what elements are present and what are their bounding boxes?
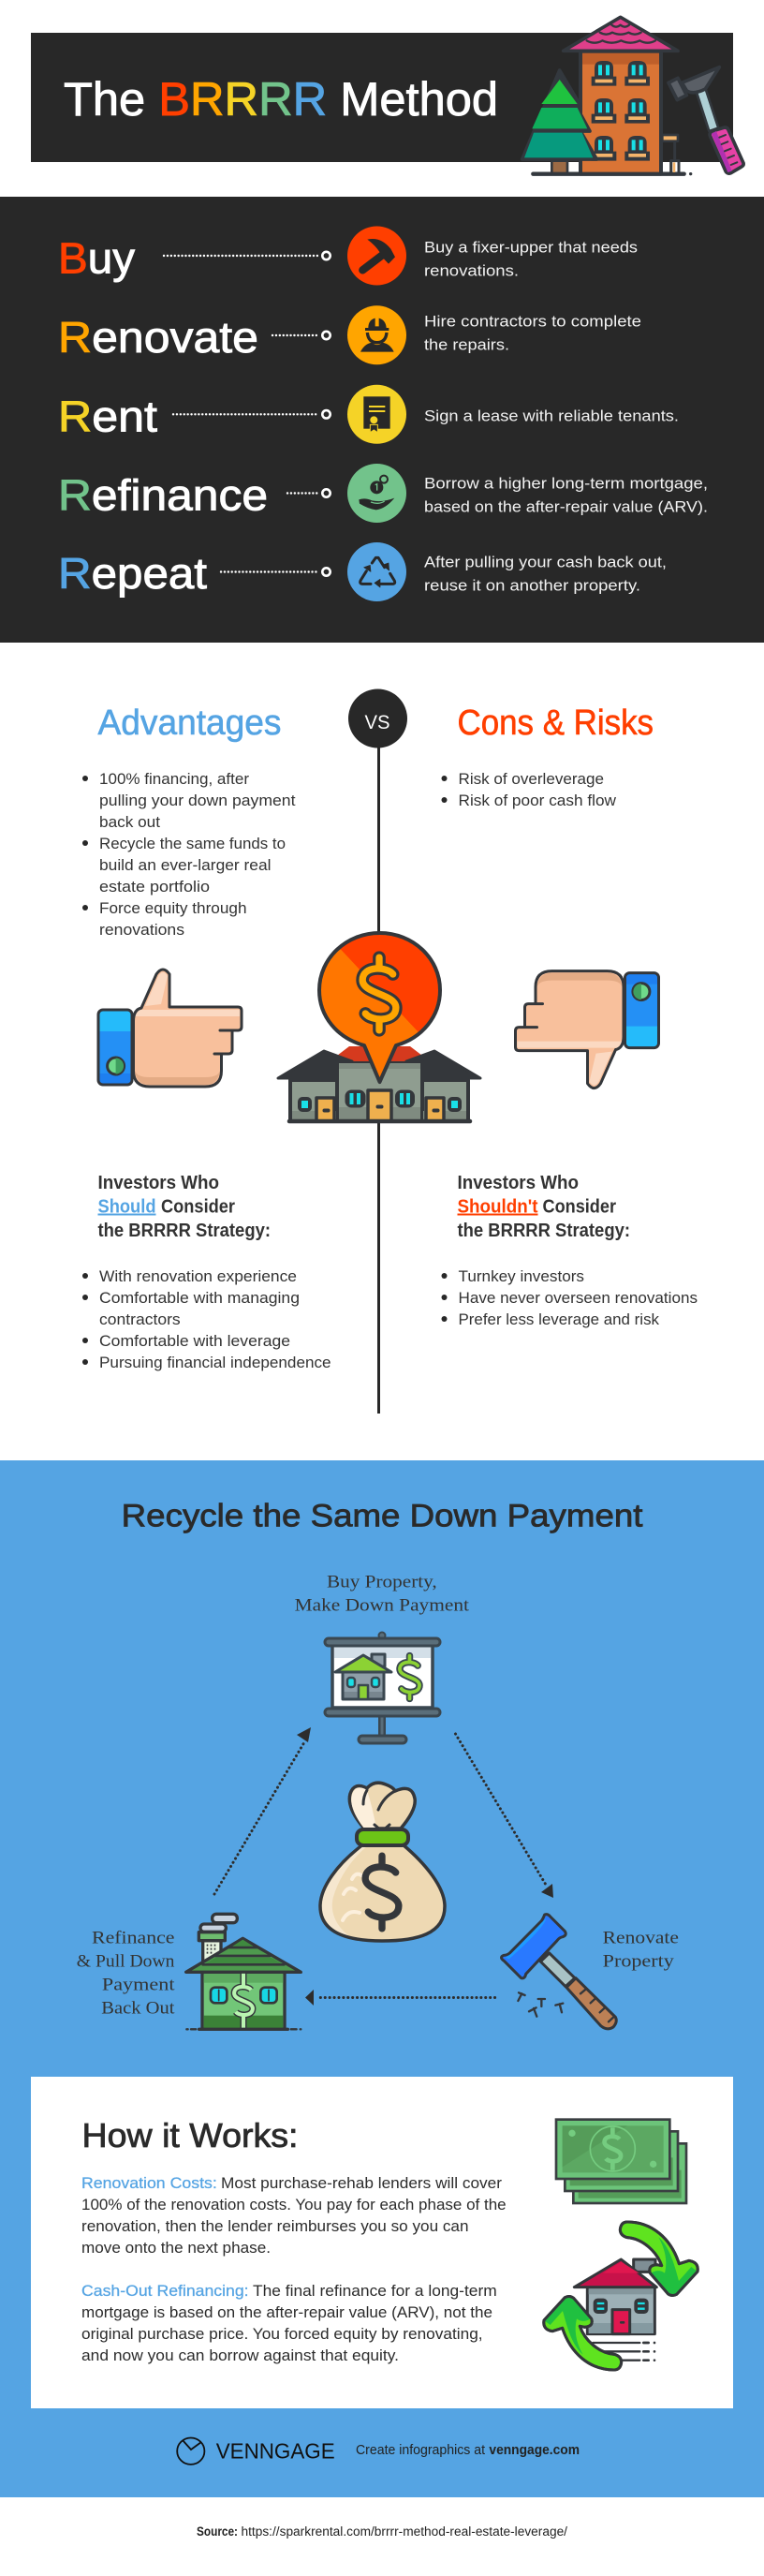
list: should consider: contractors [99,1310,181,1328]
text: investors who should not consider [457,1173,630,1241]
heading: Cons and Risks: Cons & Risks [457,703,654,743]
arrow: top green [620,2222,698,2296]
heading: Advantages: Advantages [97,703,281,743]
label: buy property: Buy Property, [327,1572,437,1592]
text: investors who should consider: Consider [161,1197,235,1218]
arrow: buy to renovate [455,1734,553,1898]
logo: Venngage [177,2437,335,2465]
badge: VS [348,689,407,748]
list: advantages: back out [99,813,160,831]
list: should not consider: Prefer less leverage and risk [459,1310,659,1328]
text: create infographics: Create infographics at [356,2442,486,2458]
step: Buy: renovations. [424,262,519,279]
step: Repeat [58,542,667,601]
label: refinance: & Pull Down [77,1952,175,1971]
icon: presentation board with house [325,1632,440,1743]
text: renovation costs: Renovation Costs: [81,2174,217,2192]
panel: how it works [31,2077,733,2408]
icon: money bag [320,1783,445,1941]
step: Renovate [58,305,641,364]
list: advantages: build an ever-larger real [99,856,272,874]
text: cash-out refinancing: original purchase price. You forced equity by renovating, [81,2325,483,2343]
icon: thumbs down [515,971,659,1088]
icon: hand holding coins [359,476,394,510]
label: refinance: Payment [102,1975,175,1995]
label: buy property [295,1572,470,1615]
heading: Recycle the Same Down Payment [122,1499,643,1534]
icon: stack of dollar bills [556,2120,686,2203]
step: Rent: Rent [58,392,157,440]
step: Renovate: the repairs. [424,335,509,354]
text: cash-out refinancing: and now you can borrow against that equity. [81,2347,399,2364]
text: investors who should not consider: the BRRRR Strategy: [457,1221,630,1241]
text: renovation costs [81,2174,507,2257]
map pin [319,933,440,1082]
logo: Venngage: VENNGAGE [216,2438,335,2463]
text: cash-out refinancing: mortgage is based on the after-repair value (ARV), not the [81,2303,492,2321]
label: refinance [77,1928,175,2018]
icon: hammer [362,239,395,270]
step: Rent [58,385,679,444]
arrow: bottom green [544,2296,622,2370]
list: cons and risks: Risk of poor cash flow [459,792,617,809]
step: Refinance: Refinance [58,470,268,519]
arrow: renovate to refinance [305,1990,495,2006]
list: should not consider: Have never overseen renovations [459,1289,698,1307]
icon: recycle arrows [360,557,395,587]
text: renovation costs: Most purchase-rehab lenders will cover [221,2174,502,2192]
arrow: refinance to buy [214,1727,311,1894]
step: Repeat: reuse it on another property. [424,577,640,594]
text: renovation costs: move onto the next phase. [81,2239,271,2257]
step: Rent: Sign a lease with reliable tenants. [424,407,679,425]
text: investors who should consider: Investors Who [97,1173,219,1193]
text: investors who should not consider: Investors Who [457,1173,579,1193]
step: Refinance: Borrow a higher long-term mortgage, [424,474,708,493]
icon: construction worker [360,318,394,352]
step: Refinance [58,464,708,523]
list: advantages: Force equity through [99,899,247,917]
text: cash-out refinancing [81,2282,497,2364]
icon: building, tree and hammer [522,17,743,175]
label: renovate property: Property [603,1952,674,1971]
text: investors who should not consider: Consider [543,1197,616,1218]
icon: lease contract [363,396,390,433]
list: cons and risks [442,770,617,809]
list: advantages: 100% financing, after [99,770,249,788]
text: create infographics [356,2442,580,2458]
text: renovation costs: 100% of the renovation costs. You pay for each phase of the [81,2196,507,2213]
list: should not consider: Turnkey investors [459,1267,584,1285]
text: renovation costs: renovation, then the lender reimburses you so you can [81,2217,468,2235]
text: source: https://sparkrental.com/brrrr-method-real-estate-leverage/ [242,2524,567,2539]
label: renovate property [603,1928,679,1971]
step: Renovate: Renovate [58,313,258,362]
badge: VS: VS [365,712,389,733]
list: cons and risks: Risk of overleverage [459,770,604,788]
text: cash-out refinancing: Cash-Out Refinancing: [81,2282,249,2300]
text: cash-out refinancing: The final refinance for a long-term [253,2282,497,2300]
icon: green house with dollar [186,1914,301,2029]
list: should consider: With renovation experience [99,1267,297,1285]
list: should consider: Pursuing financial independence [99,1354,331,1371]
label: refinance: Back Out [101,1999,175,2018]
step: Repeat: After pulling your cash back out, [424,553,667,571]
title: The BRRRR Method [64,73,498,126]
text: investors who should consider: the BRRRR Strategy: [97,1221,271,1241]
label: buy property: Make Down Payment [295,1596,470,1615]
step: Buy [58,227,638,285]
list: advantages: estate portfolio [99,878,210,896]
step: Buy: Buy [58,234,135,283]
text: investors who should consider [97,1173,271,1241]
text: investors who should consider: Should [97,1197,155,1218]
icon: houses with dollar map pin [278,933,480,1121]
step: Repeat: Repeat [58,549,207,598]
text: investors who should not consider: Shouldn't [457,1197,538,1218]
heading: How it Works: [82,2116,298,2154]
windows [592,61,650,161]
list: advantages: pulling your down payment [99,792,296,809]
list: advantages [82,770,296,939]
list: should not consider [442,1267,698,1328]
list: advantages: renovations [99,921,184,939]
step: Buy: Buy a fixer-upper that needs [424,238,638,257]
panel: title banner [31,33,733,162]
step: Renovate: Hire contractors to complete [424,313,641,330]
label: renovate property: Renovate [603,1928,679,1948]
icon: thumbs up [98,970,242,1087]
list: should consider [82,1267,331,1371]
step: Refinance: based on the after-repair value (ARV). [424,498,708,515]
list: should consider: Comfortable with managing [99,1289,300,1307]
icon: hammer and nails [501,1915,616,2029]
text: source: Source: [197,2524,238,2539]
text: create infographics: venngage.com [489,2442,580,2458]
panel: five BRRRR steps [0,197,764,643]
list: should consider: Comfortable with leverage [99,1332,290,1350]
icon: house with green cycle arrows [544,2222,698,2370]
list: advantages: Recycle the same funds to [99,835,286,852]
divider: vs line [348,689,407,1414]
label: refinance: Refinance [92,1928,174,1948]
